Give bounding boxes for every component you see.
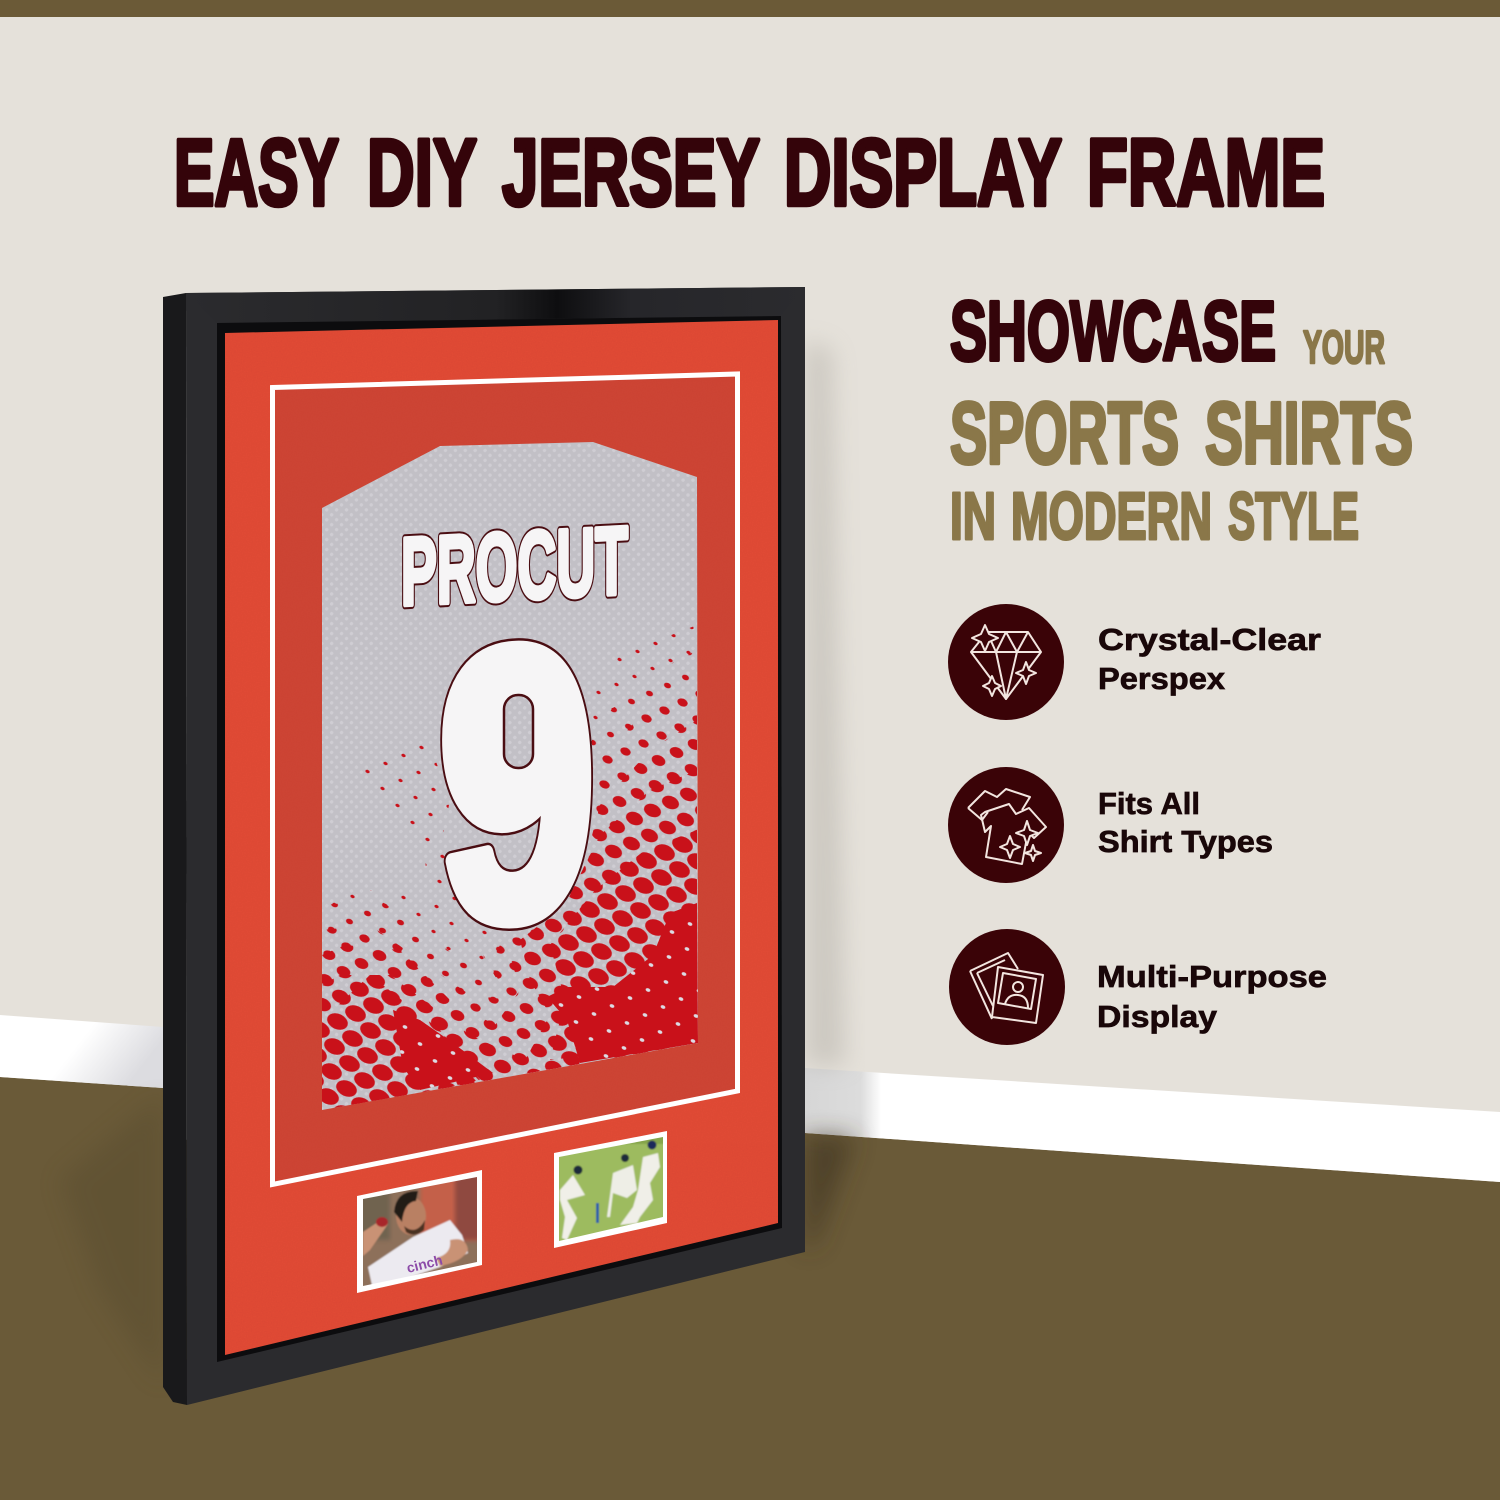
photo: bowler [357, 1170, 482, 1293]
mat grain [225, 320, 778, 1355]
top band [0, 0, 1500, 17]
white mat line [272, 374, 738, 1184]
head [396, 1197, 426, 1235]
label: Perspex [1098, 661, 1226, 696]
player number: 9 [438, 565, 596, 1002]
panel: jersey frame [163, 287, 805, 1405]
label [1098, 786, 1273, 859]
inner lip shadow [217, 316, 782, 1362]
heading: sports shirts: SPORTS [950, 385, 1179, 482]
shirt [368, 1220, 468, 1290]
wall shadow behind frame [805, 340, 845, 1066]
floor shadow behind frame [805, 1135, 855, 1250]
halftone pattern [322, 625, 698, 1115]
player number: 9 [438, 565, 596, 1002]
label [1098, 622, 1321, 696]
stumps [596, 1203, 599, 1223]
floor [0, 1077, 1500, 1500]
frame side face [163, 293, 187, 1405]
heading: your: YOUR [1303, 321, 1385, 373]
feature: crystal-clear perspex [948, 604, 1321, 720]
label: Display [1097, 999, 1218, 1034]
heading: showcase: SHOWCASE [950, 284, 1276, 378]
fielder [607, 1165, 637, 1217]
red mat [225, 320, 778, 1355]
player name: PROCUT [401, 507, 628, 626]
main title: EASY [174, 120, 339, 226]
feature: fits all shirt types [948, 767, 1273, 883]
frame front [186, 287, 805, 1405]
photo: cricket [554, 1130, 667, 1248]
label [1097, 959, 1327, 1034]
main title: DIY [367, 120, 477, 226]
main title [174, 120, 1325, 226]
label: Shirt Types [1098, 824, 1273, 859]
frame top sheen [186, 287, 805, 323]
icon: photos [949, 929, 1065, 1045]
wicket keeper [560, 1175, 585, 1240]
heading: in modern style: STYLE [1228, 479, 1359, 554]
player name [401, 507, 628, 626]
skirting board right [805, 1068, 1500, 1182]
main title: FRAME [1087, 120, 1325, 226]
jersey base fabric [322, 442, 698, 1110]
label: Multi-Purpose [1097, 959, 1327, 994]
skirting board left [0, 1015, 163, 1088]
main title: JERSEY [502, 120, 760, 226]
jersey [322, 442, 698, 1115]
feature: multi-purpose display [949, 929, 1327, 1045]
label: Fits All [1098, 786, 1200, 821]
player name: PROCUT [401, 507, 628, 626]
icon: diamond [948, 604, 1064, 720]
sponsor logo: cinch [405, 1252, 444, 1276]
narrow counter of the number [486, 695, 546, 795]
floor shadow left of frame [60, 1095, 163, 1385]
heading: in modern style: MODERN [1011, 479, 1212, 554]
batter [620, 1153, 660, 1225]
label: Crystal-Clear [1098, 622, 1321, 657]
inner recessed mat [274, 376, 737, 1183]
heading: in modern style: IN [950, 479, 996, 554]
main title: DISPLAY [784, 120, 1062, 226]
arms [363, 1222, 388, 1256]
icon: shirts [948, 767, 1064, 883]
